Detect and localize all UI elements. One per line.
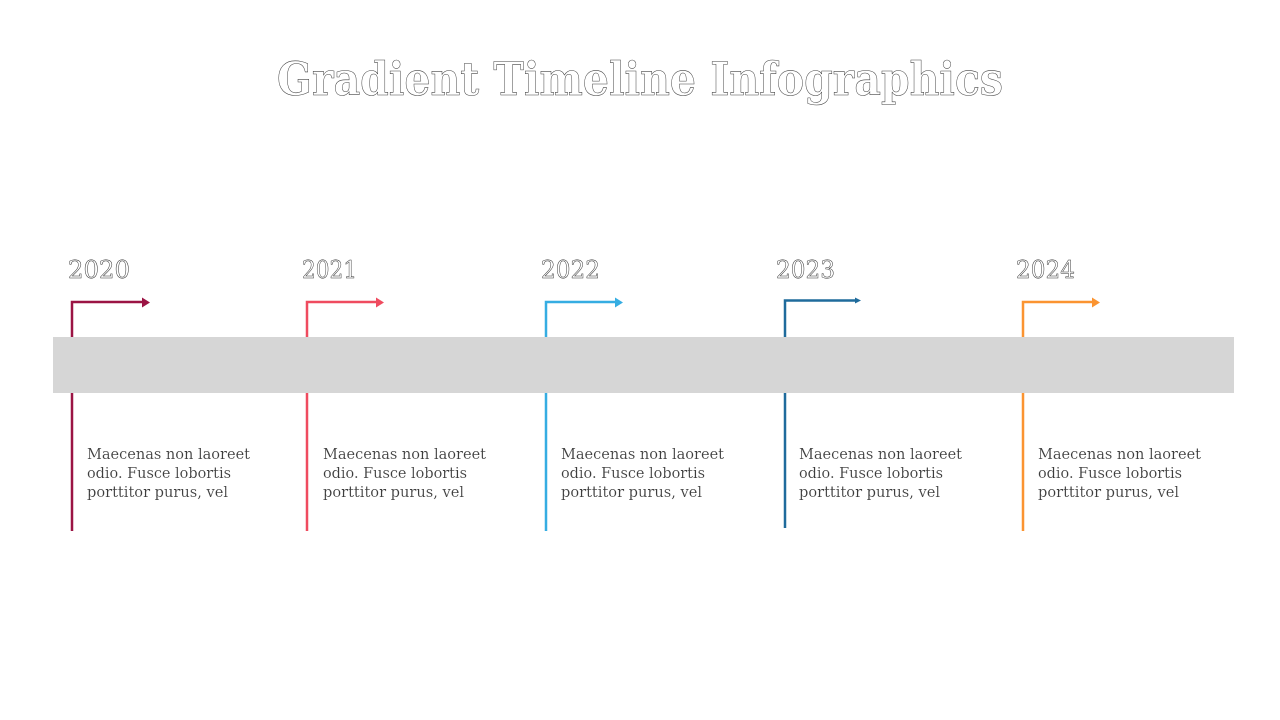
year 2020: 2020 [68, 256, 130, 284]
text 2024: Maecenas non laoreet [1038, 445, 1201, 463]
text 2023: porttitor purus, vel [799, 483, 940, 501]
milestone 2020 [68, 256, 250, 531]
text 2023: odio. Fusce lobortis [799, 464, 943, 482]
milestone 2023 [776, 256, 962, 528]
stem 2021 [306, 393, 308, 531]
milestone 2024 [1016, 256, 1201, 531]
milestone 2021 [302, 256, 486, 531]
text 2021: odio. Fusce lobortis [323, 464, 467, 482]
text 2020: Maecenas non laoreet [87, 445, 250, 463]
year 2021: 2021 [302, 256, 357, 284]
text 2024: porttitor purus, vel [1038, 483, 1179, 501]
text 2021: Maecenas non laoreet [323, 445, 486, 463]
text 2024: odio. Fusce lobortis [1038, 464, 1182, 482]
arrow 2021 [307, 298, 384, 337]
year 2022: 2022 [541, 256, 600, 284]
arrow 2022 [546, 298, 623, 337]
text 2022: Maecenas non laoreet [561, 445, 724, 463]
year 2023: 2023 [776, 256, 835, 284]
arrow 2023 [785, 298, 861, 337]
arrow 2020 [72, 298, 150, 337]
text 2022: odio. Fusce lobortis [561, 464, 705, 482]
stem 2022 [545, 393, 547, 531]
year 2024: 2024 [1016, 256, 1075, 284]
text 2021: porttitor purus, vel [323, 483, 464, 501]
stem 2020 [71, 393, 73, 531]
stem 2024 [1022, 393, 1024, 531]
text 2020: odio. Fusce lobortis [87, 464, 231, 482]
text 2020: porttitor purus, vel [87, 483, 228, 501]
stem 2023 [784, 393, 786, 528]
arrow 2024 [1023, 298, 1100, 337]
text 2023: Maecenas non laoreet [799, 445, 962, 463]
milestone 2022 [541, 256, 724, 531]
timeline bar [53, 337, 1234, 393]
title: Gradient Timeline Infographics [277, 52, 1003, 106]
text 2022: porttitor purus, vel [561, 483, 702, 501]
